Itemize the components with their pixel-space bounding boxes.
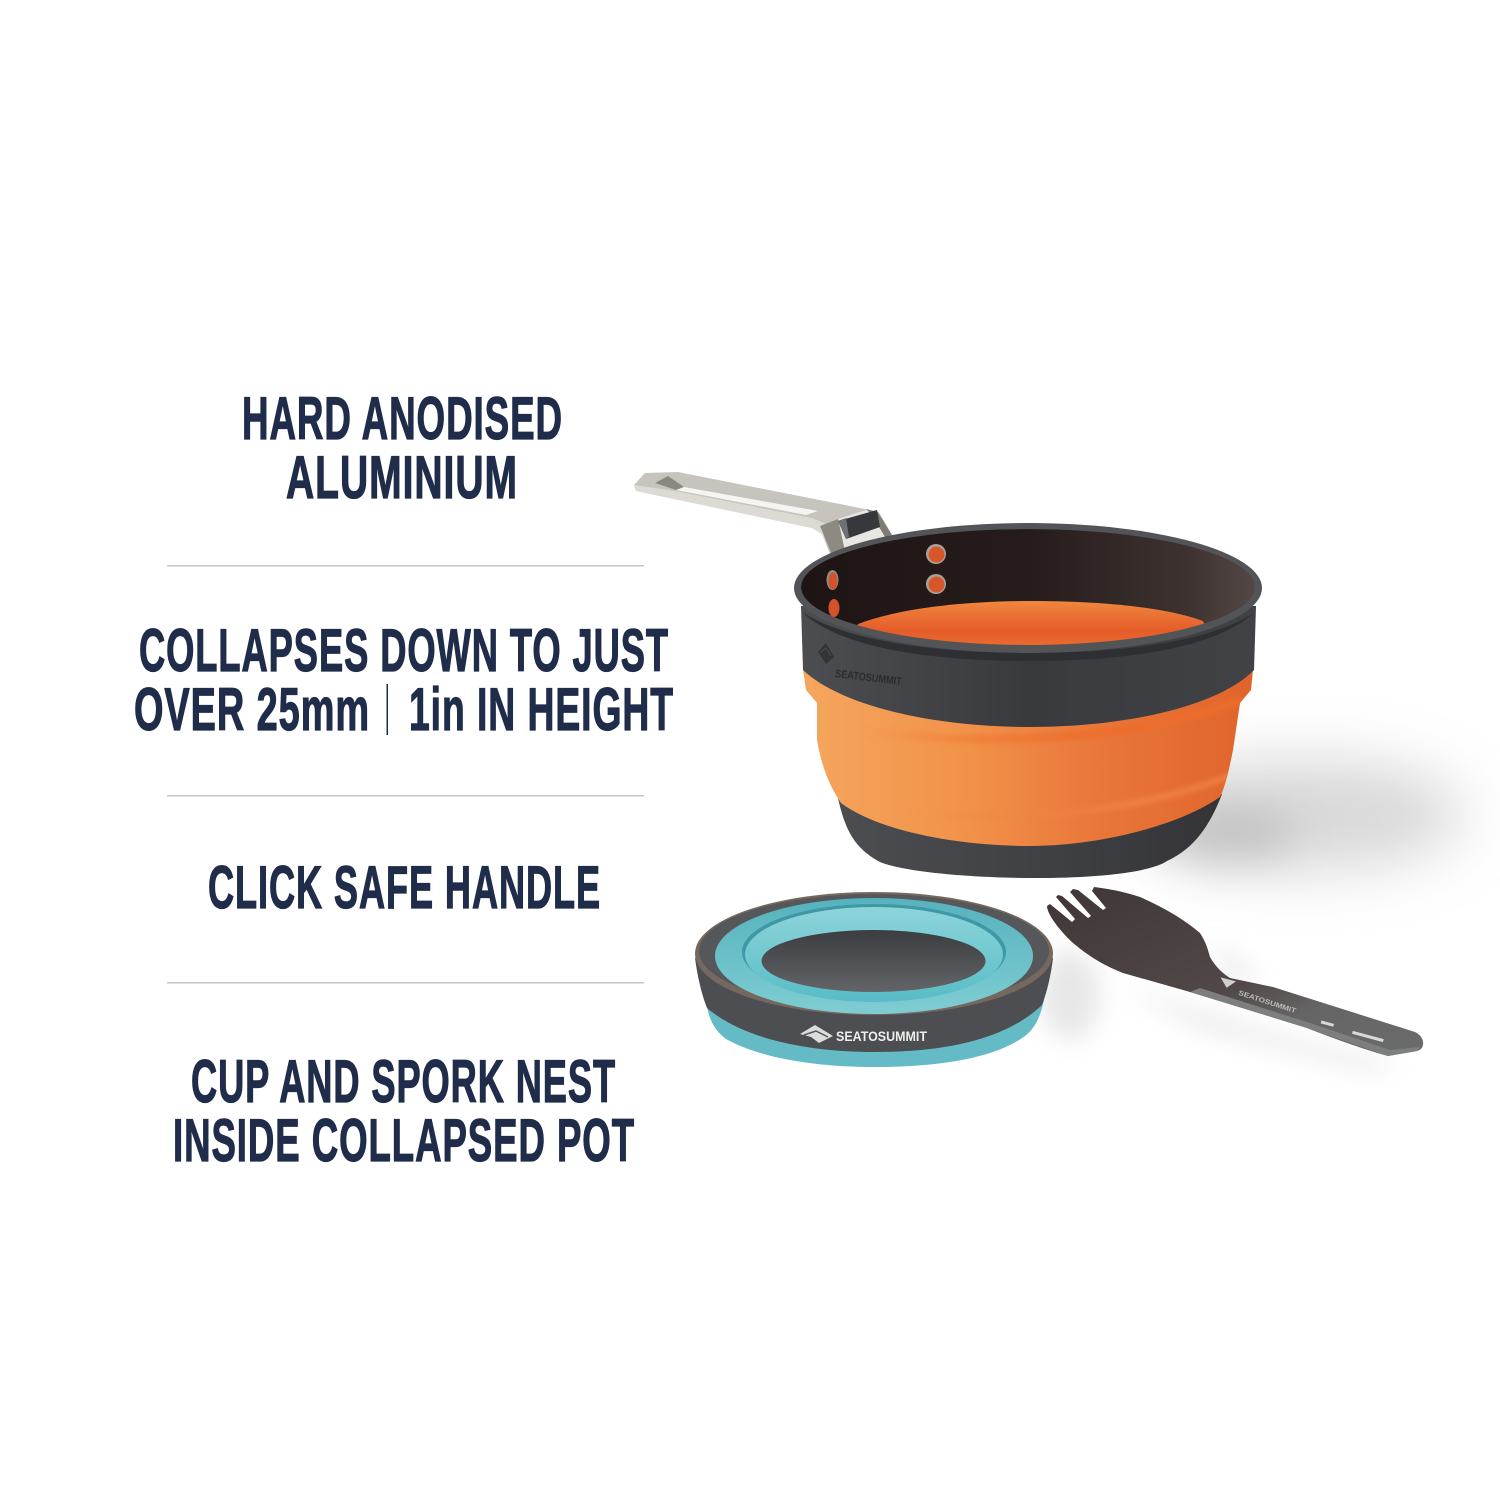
- silicone fold highlights: [922, 699, 1244, 808]
- infographic canvas: [135, 396, 1475, 1162]
- spork logo: SEATOSUMMIT: [1237, 990, 1297, 1015]
- pot handle: [634, 472, 892, 556]
- pot rim: [794, 523, 1262, 653]
- icon: collapsed cup: [695, 892, 1053, 1067]
- feature text: collapsed height: [134, 617, 674, 743]
- cup teal base band: [706, 1000, 1044, 1067]
- cup well: [762, 930, 986, 992]
- icon: spork: [1047, 887, 1423, 1056]
- inner teal ring: [745, 907, 1003, 1002]
- ring crease: [742, 904, 1006, 1000]
- feature text: collapsed height: 1in IN HEIGHT: [409, 676, 674, 743]
- cup dark band: [695, 958, 1053, 1052]
- spork handle edge: [1190, 988, 1420, 1056]
- feature text: hard anodised aluminium: [242, 385, 563, 511]
- feature text: collapsed height: COLLAPSES DOWN TO JUST: [139, 617, 669, 684]
- rim lower shadow: [802, 612, 1255, 661]
- feature text: cup and spork nest: INSIDE COLLAPSED POT: [173, 1107, 635, 1174]
- pot interior: [801, 529, 1255, 645]
- cup rim: [695, 892, 1053, 1015]
- feature text: hard anodised aluminium: ALUMINIUM: [286, 444, 518, 511]
- pot logo: SEATOSUMMIT: [834, 668, 903, 688]
- feature text: collapsed height: OVER 25mm: [134, 676, 370, 743]
- pot logo: [818, 643, 903, 688]
- upper dark band: [801, 606, 1256, 727]
- spork logo: [1217, 976, 1300, 1015]
- cup inner face: [699, 894, 1049, 1008]
- cup and spork shadow: [1040, 940, 1400, 1072]
- pot base: [838, 794, 1222, 878]
- cup logo: SEATOSUMMIT: [836, 1028, 927, 1044]
- orange silicone wall: [803, 670, 1253, 846]
- cup logo: [800, 1025, 927, 1044]
- feature text: cup and spork nest: [173, 1048, 635, 1174]
- icon: folding pot: [634, 472, 1262, 878]
- feature text: hard anodised aluminium: HARD ANODISED: [242, 385, 563, 452]
- pot shadow: [1135, 760, 1465, 870]
- outer teal ring: [715, 898, 1033, 1014]
- feature text: click safe handle: CLICK SAFE HANDLE: [208, 854, 601, 921]
- feature text: cup and spork nest: CUP AND SPORK NEST: [191, 1048, 616, 1115]
- rivets: [826, 544, 946, 617]
